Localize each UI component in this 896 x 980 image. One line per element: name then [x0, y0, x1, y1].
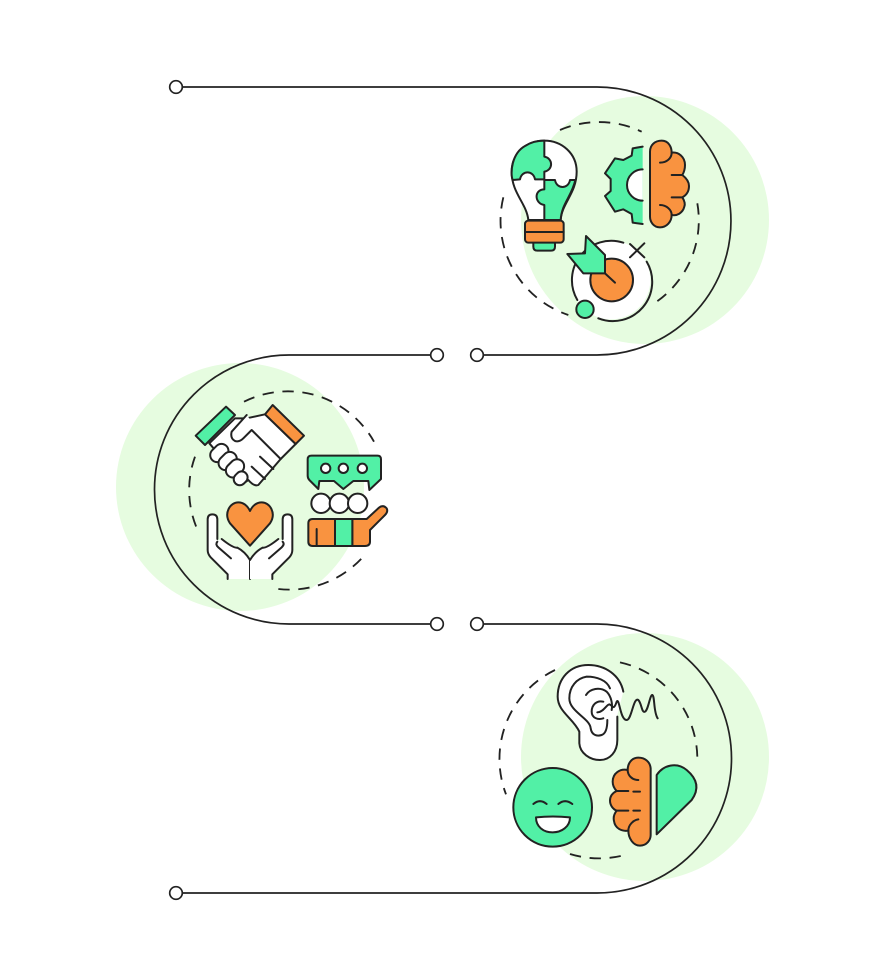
icon: hands holding heart	[208, 502, 292, 579]
panel: top icons	[501, 122, 699, 321]
icon: gear and brain	[605, 141, 689, 227]
dashed ring: bottom	[499, 662, 697, 858]
panel: middle icons	[189, 391, 387, 590]
icon: brain and heart	[610, 758, 696, 846]
icon: target with arrow	[567, 236, 652, 321]
background blob: top	[521, 96, 769, 344]
icon: puzzle light bulb	[512, 141, 577, 251]
icon: speech bubble and team	[308, 456, 387, 546]
dashed ring: middle	[189, 391, 374, 590]
dashed ring: top	[501, 122, 699, 315]
endpoint dots	[170, 81, 483, 899]
icon: handshake	[196, 405, 304, 488]
icon: smiling face	[513, 768, 592, 847]
connector line: middle	[154, 355, 431, 624]
background blob: bottom	[521, 633, 769, 881]
panel: bottom icons	[499, 662, 697, 858]
icon: ear with sound wave	[558, 665, 658, 760]
connector line: bottom	[182, 624, 732, 893]
connector line: top	[182, 87, 731, 355]
background blob: middle	[116, 363, 364, 611]
